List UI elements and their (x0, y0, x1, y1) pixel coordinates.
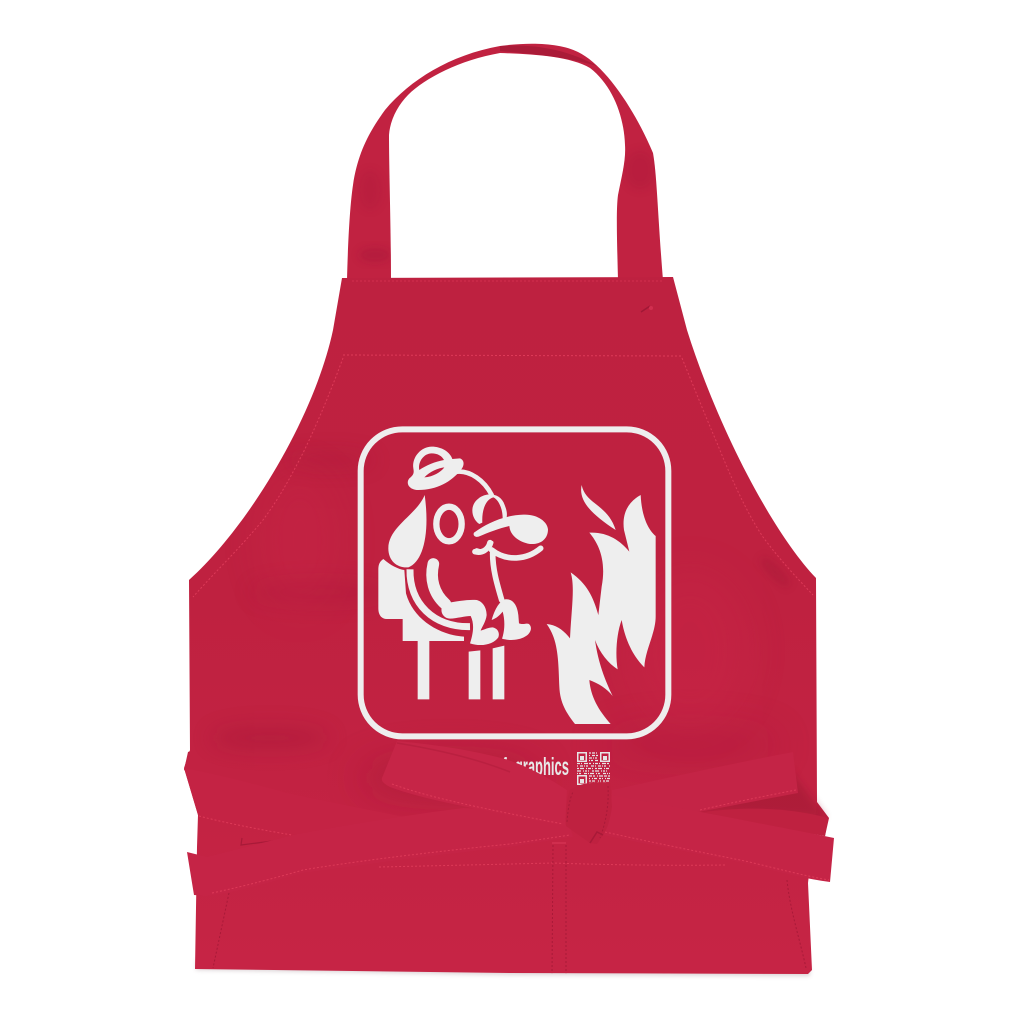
apron drop shadow (196, 960, 810, 976)
left tie flap behind apron (184, 750, 194, 775)
chair legs (418, 641, 504, 699)
dog eye (436, 507, 462, 541)
dog head and hat (388, 447, 548, 567)
printed design: dog in fire pictogram (361, 429, 668, 736)
dog smile (477, 543, 492, 551)
left waist tie upper (184, 768, 410, 835)
tie knot (566, 783, 612, 844)
dog mouth and neck (475, 543, 541, 600)
dog front leg (441, 600, 499, 645)
left waist tie tail (187, 808, 573, 896)
brand text: Infographics (491, 753, 569, 781)
sign frame (361, 429, 668, 736)
right back tie behind apron (790, 802, 829, 836)
dog back (410, 569, 470, 627)
neck strap (340, 38, 670, 283)
right waist tie tail (603, 795, 834, 882)
dog brow (472, 494, 507, 524)
fabric folds and stitching (193, 281, 813, 975)
flames (547, 485, 656, 724)
dog head outline (457, 472, 492, 495)
bow right loop (612, 752, 798, 812)
apron product illustration (184, 44, 834, 978)
dog back leg (492, 599, 531, 640)
dark fold under right tie (640, 770, 826, 818)
apron body (184, 277, 817, 974)
chair (378, 559, 464, 641)
dog arm (432, 564, 445, 604)
bow left loop (382, 741, 567, 826)
dog body and chair (378, 543, 541, 699)
dog hat (408, 447, 464, 490)
right back tie (703, 809, 828, 836)
dog ear (388, 495, 426, 567)
QR code (577, 752, 610, 785)
dog snout and nose (474, 515, 548, 544)
